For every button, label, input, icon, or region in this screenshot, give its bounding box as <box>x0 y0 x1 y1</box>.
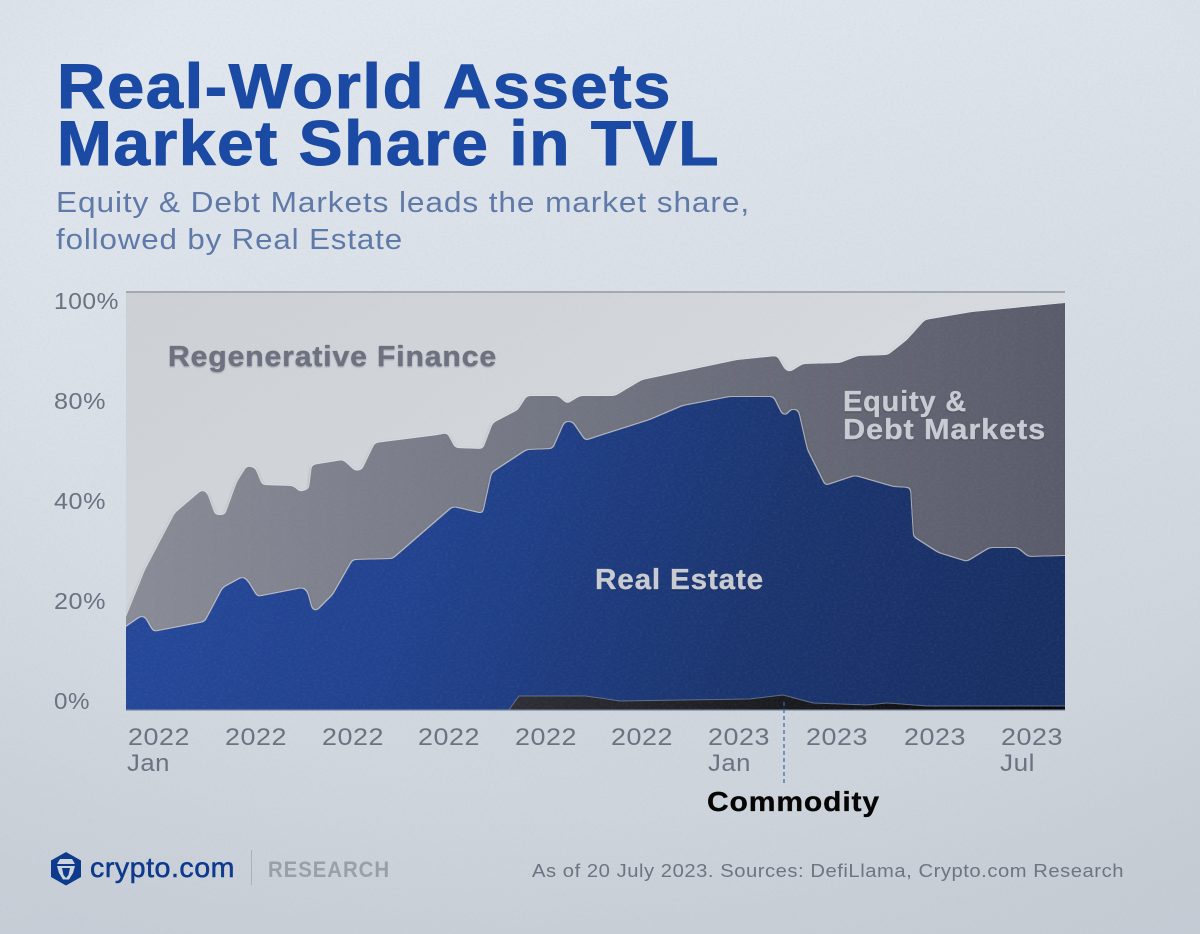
y axis labels <box>54 288 119 714</box>
chart top edge <box>126 291 1065 293</box>
x axis labels: 2022 <box>128 724 190 751</box>
x axis labels: 2022 <box>611 724 673 751</box>
area: equity and debt markets <box>126 303 1065 632</box>
chart paper texture <box>126 397 1065 710</box>
area: real estate <box>110 397 1085 730</box>
label: equity and debt markets <box>843 386 1046 446</box>
x axis labels: 2022 <box>225 724 287 751</box>
x axis labels: 2023 <box>708 724 770 751</box>
x axis labels: 2022 <box>418 724 480 751</box>
label: real estate: Real Estate <box>595 564 764 596</box>
label: equity and debt markets: Debt Markets <box>843 414 1046 446</box>
x axis labels: 2023 <box>1001 724 1063 751</box>
commodity leader line <box>783 702 785 786</box>
source note: As of 20 July 2023. Sources: DefiLlama, Crypto.com Research <box>532 860 1124 881</box>
x axis labels: Jan <box>127 750 170 777</box>
wordmark: crypto.com <box>90 852 235 883</box>
label: commodity: Commodity <box>707 786 880 817</box>
chart: stacked area market share <box>110 291 1085 730</box>
research label: RESEARCH <box>268 857 390 882</box>
icon: crypto.com hexagon <box>51 852 81 886</box>
subtitle: Equity & Debt Markets leads the market share, <box>56 187 750 219</box>
x axis labels: Jul <box>1000 750 1035 777</box>
x axis labels: 2023 <box>904 724 966 751</box>
y axis labels: 100% <box>54 288 119 314</box>
y axis labels: 40% <box>54 488 106 514</box>
y axis labels: 0% <box>54 688 90 714</box>
divider <box>250 850 252 885</box>
x axis labels: 2023 <box>806 724 868 751</box>
area: commodity <box>508 695 1070 711</box>
chart baseline <box>126 710 1065 711</box>
x axis labels <box>127 724 1063 777</box>
y axis labels: 20% <box>54 588 106 614</box>
title: Real-World Assets <box>57 52 672 122</box>
stacked areas, clipped to plot <box>126 303 1065 710</box>
subtitle <box>56 187 750 256</box>
title: Market Share in TVL <box>57 109 720 179</box>
logo: crypto.com <box>51 852 235 886</box>
x axis labels: 2022 <box>515 724 577 751</box>
label: regenerative finance: Regenerative Finance <box>168 341 497 373</box>
subtitle: followed by Real Estate <box>56 224 403 256</box>
y axis labels: 80% <box>54 388 106 414</box>
x axis labels: 2022 <box>322 724 384 751</box>
title <box>57 52 720 179</box>
chart panel: regenerative finance area <box>126 292 1065 710</box>
x axis labels: Jan <box>708 750 751 777</box>
label: equity and debt markets: Equity & <box>843 386 967 418</box>
